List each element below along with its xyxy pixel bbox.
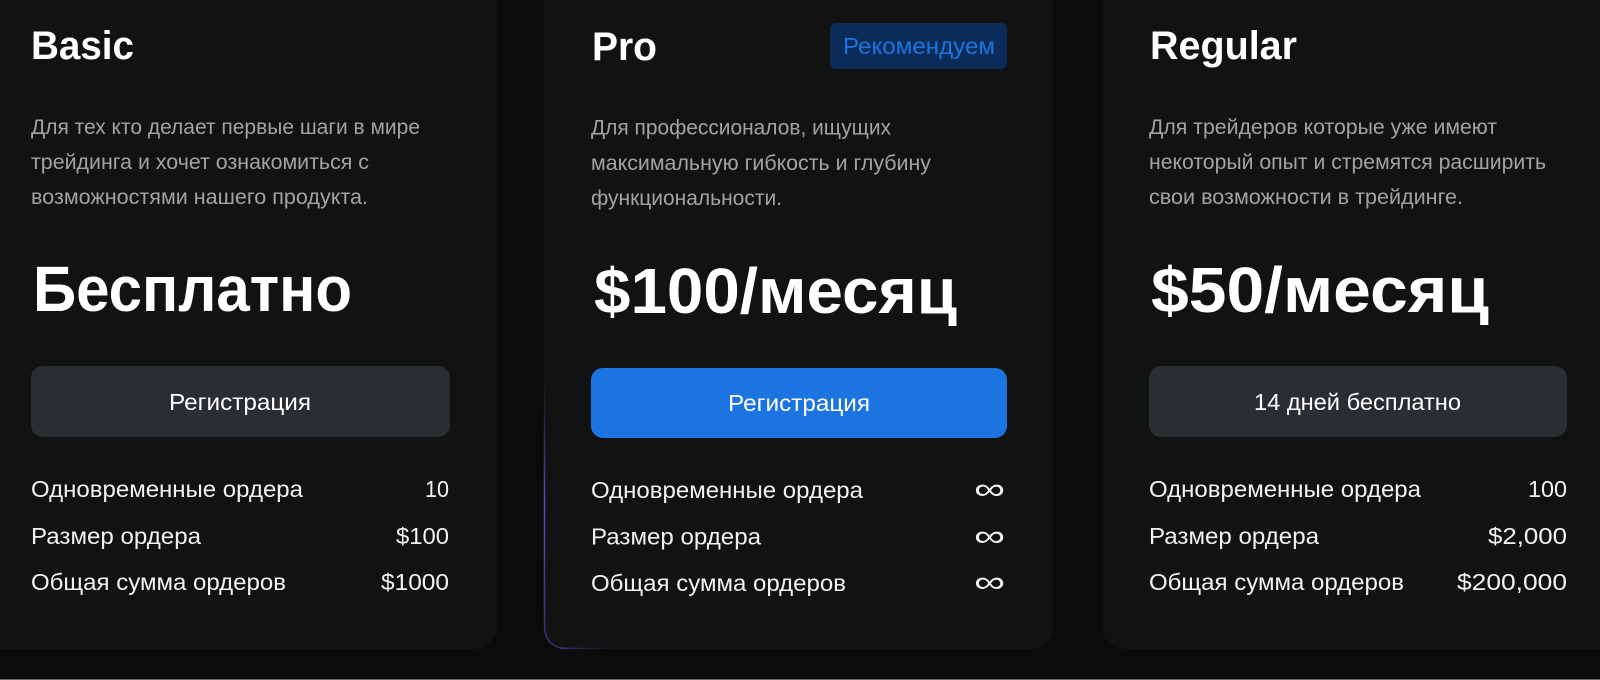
limits table: Basic: 10 (425, 476, 449, 502)
panel: Basic plan (0, 0, 497, 649)
heading: Basic: Basic (31, 24, 134, 68)
badge: recommended: Рекомендуем (843, 33, 995, 59)
button: Regular free trial (1149, 366, 1567, 437)
limits table: Basic: Одновременные ордера (31, 476, 303, 502)
limits table: Pro: Общая сумма ордеров (591, 570, 846, 596)
description: Basic: возможностями нашего продукта. (31, 186, 368, 209)
description: Pro: максимальную гибкость и глубину (591, 152, 931, 175)
button: Basic registration (31, 366, 450, 437)
limits table: Pro: Размер ордера (591, 524, 761, 550)
price: Basic: Бесплатно (33, 253, 352, 325)
price: Pro: $100/месяц (594, 255, 957, 327)
limits table: Basic: $1000 (381, 569, 449, 595)
limits table: Pro: Одновременные ордера (591, 477, 863, 503)
limits table: Regular (1149, 476, 1567, 595)
panel: Regular plan (1102, 0, 1600, 649)
accent edge: Pro card (544, 380, 612, 648)
heading: Pro: Pro (592, 25, 657, 69)
description: Regular (1149, 116, 1546, 209)
description: Regular: свои возможности в трейдинге. (1149, 186, 1463, 209)
limits table: Basic: Размер ордера (31, 523, 201, 549)
limits table: Basic (31, 476, 449, 595)
limits table: Pro (591, 473, 1005, 599)
badge: recommended (830, 23, 1007, 69)
limits table: Basic: Общая сумма ордеров (31, 569, 286, 595)
button: Pro registration (591, 368, 1007, 438)
limits table: Regular: Общая сумма ордеров (1149, 569, 1404, 595)
description: Pro: функциональности. (591, 187, 782, 210)
limits table: Pro: ∞ (974, 520, 1005, 553)
description: Basic: Для тех кто делает первые шаги в мире (31, 116, 420, 139)
button: Basic registration: Регистрация (169, 389, 311, 415)
description: Basic (31, 116, 420, 209)
description: Pro (591, 116, 931, 210)
description: Basic: трейдинга и хочет ознакомиться с (31, 151, 369, 174)
panel: Pro plan (544, 0, 1053, 649)
limits table: Regular: Одновременные ордера (1149, 476, 1421, 502)
limits table: Basic: $100 (396, 523, 449, 549)
limits table: Regular: $2,000 (1488, 523, 1567, 549)
description: Pro: Для профессионалов, ищущих (591, 116, 891, 140)
limits table: Regular: 100 (1528, 476, 1567, 502)
price: Regular: $50/месяц (1151, 254, 1489, 326)
heading: Regular: Regular (1150, 24, 1297, 68)
description: Regular: Для трейдеров которые уже имеют (1149, 116, 1497, 139)
button: Regular free trial: 14 дней бесплатно (1254, 389, 1461, 415)
limits table: Regular: $200,000 (1457, 569, 1567, 595)
button: Pro registration: Регистрация (728, 390, 870, 416)
limits table: Pro: ∞ (974, 473, 1005, 506)
description: Regular: некоторый опыт и стремятся расширить (1149, 151, 1546, 174)
limits table: Regular: Размер ордера (1149, 523, 1319, 549)
limits table: Pro: ∞ (974, 566, 1005, 599)
